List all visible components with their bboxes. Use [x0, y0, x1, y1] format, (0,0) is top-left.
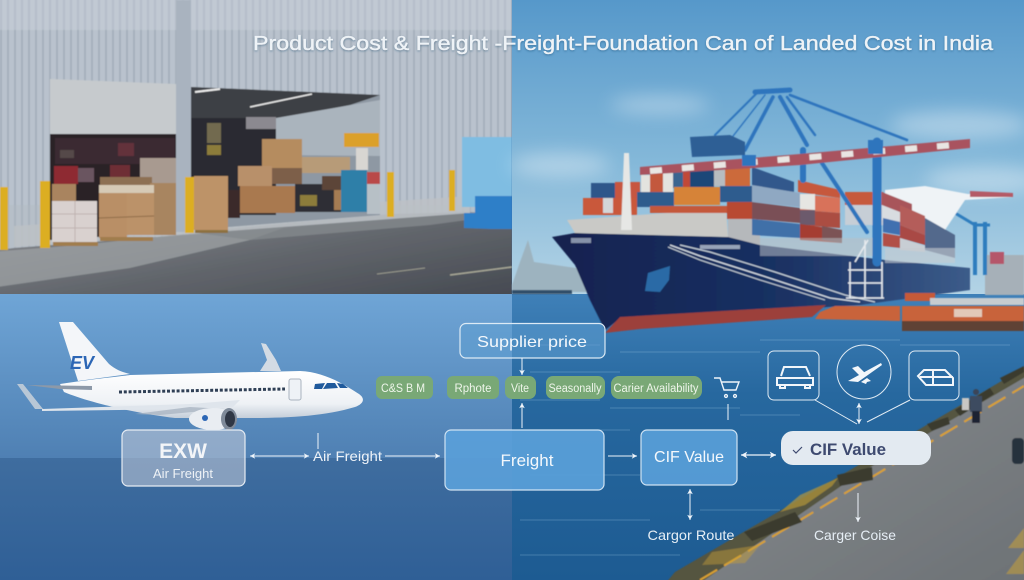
box: EXW: Air Freight [153, 466, 213, 481]
pill: Vite: Vite [511, 383, 529, 395]
plane far wing [260, 343, 281, 371]
box: EXW [122, 430, 245, 486]
arrow: CIF to CIF pill [741, 454, 776, 456]
distant port [512, 240, 1024, 295]
quay fenders [744, 366, 1024, 541]
bow mast [621, 153, 632, 230]
arrow: CIF pill to cargo [857, 493, 859, 522]
container stacks [583, 167, 955, 263]
label: cargo route: Cargor Route [648, 527, 735, 543]
plane engine [189, 408, 237, 430]
crane machinery cab [690, 135, 745, 157]
pill: Carier Availability: Carier Availability [614, 383, 699, 395]
crane boom [640, 139, 970, 175]
box: supplier price: Supplier price [477, 334, 587, 351]
icon: van [909, 351, 959, 400]
arrow: cart to CIF [727, 404, 729, 420]
pill: Seasonally [546, 376, 605, 399]
connectors: icons to CIF pill [815, 400, 910, 424]
label: air freight: Air Freight [313, 448, 382, 464]
warehouse left door with shutter [50, 79, 176, 246]
label: cargo cost: Carger Coise [814, 527, 896, 543]
box: supplier price [460, 324, 605, 358]
plane horizontal stabiliser [27, 385, 92, 390]
box: CIF value [641, 430, 737, 485]
pill: CIF value: CIF Value [810, 440, 886, 459]
arrow: supplier price to factors [521, 358, 523, 375]
icon: car [768, 351, 819, 400]
clouds [510, 96, 1024, 194]
gantry crane [715, 90, 907, 262]
warehouse right door with stacked cartons [191, 87, 380, 233]
sea ripples [520, 340, 1010, 555]
plane main wing and winglet [17, 384, 240, 415]
pill: Rphote [447, 376, 499, 399]
ship markings [571, 238, 875, 302]
parked car [1012, 438, 1024, 464]
ship hull [552, 233, 970, 330]
arrow: freight to CIF [608, 455, 637, 457]
panel: blue sky backdrop [512, 0, 1024, 294]
factor pills [376, 376, 702, 399]
box: CIF value: CIF Value [654, 449, 724, 466]
connector above air freight [317, 433, 319, 449]
yellow bollards [0, 170, 455, 250]
panel: warehouse photo [0, 0, 512, 304]
panel: container ship at terminal [512, 90, 1024, 333]
people on the quay [962, 389, 982, 423]
icon: airplane [837, 345, 891, 399]
arrow: air freight to freight [385, 455, 440, 457]
arrow: EXW to air freight [250, 455, 309, 457]
pill: Seasonally: Seasonally [548, 383, 602, 395]
arrow: CIF to cargo route [689, 489, 691, 520]
plane fuselage [60, 371, 363, 418]
pill: Carier Availability [611, 376, 702, 399]
panel: quay road [660, 362, 1024, 580]
box: EXW: EXW [159, 440, 207, 463]
second crane [950, 210, 990, 275]
plane windows [119, 379, 348, 400]
title: Product Cost & Freight -Freight-Foundation Can of Landed Cost in India [253, 33, 994, 55]
pill: C&S B M: C&S B M [381, 383, 425, 395]
blue crate [462, 137, 512, 229]
panel: sea [512, 294, 1024, 580]
plane tail fin [59, 322, 130, 381]
icon: shopping cart [714, 378, 739, 397]
orange barges [815, 293, 1024, 331]
pill: C&S B M [376, 376, 433, 399]
airplane [17, 322, 363, 430]
pill: CIF value [781, 431, 931, 465]
deck block [567, 209, 728, 237]
pill: Vite [505, 376, 536, 399]
box: freight: Freight [501, 451, 554, 470]
quay gantry cage [846, 240, 884, 298]
arrow: freight to factors [521, 403, 523, 428]
pill: Rphote: Rphote [454, 383, 492, 395]
ship superstructure [885, 186, 1013, 230]
panel: aviation backdrop [0, 294, 512, 580]
tail logo: EV [70, 353, 96, 373]
box: freight [445, 430, 604, 490]
